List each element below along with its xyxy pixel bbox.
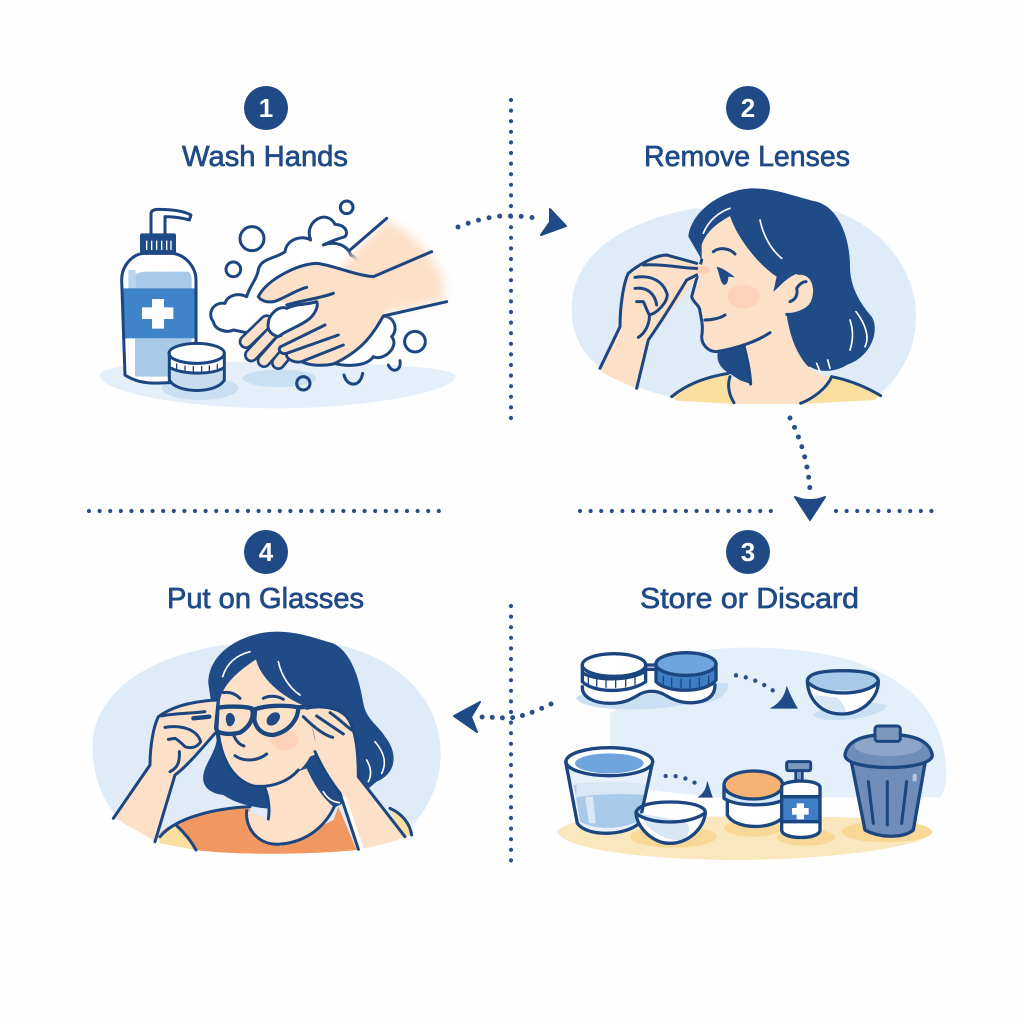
ground shadow xyxy=(100,362,456,408)
background blob xyxy=(93,645,441,852)
shirt sleeves xyxy=(158,808,412,850)
step 3 heading xyxy=(640,530,859,615)
cheek blush xyxy=(271,730,299,750)
arrow: step 3 to step 4 xyxy=(454,702,551,732)
step 2 heading: 2 xyxy=(741,93,755,123)
step 4 heading: 4 xyxy=(259,537,274,567)
soap bubbles xyxy=(226,201,425,390)
panel: store or discard illustration xyxy=(557,648,946,860)
step 4 heading xyxy=(167,530,364,615)
step 1 heading: Wash Hands xyxy=(182,141,348,173)
icon: right hand xyxy=(303,706,407,850)
soap foam xyxy=(211,217,395,365)
icon: soap pump bottle xyxy=(122,209,196,383)
icon: left hand xyxy=(113,700,217,842)
step 3 heading: Store or Discard xyxy=(640,583,859,615)
icon: jar xyxy=(169,343,224,391)
shirt xyxy=(672,375,880,404)
step 2 heading xyxy=(644,86,850,173)
panel: put on glasses illustration xyxy=(93,632,441,854)
icon: open jar xyxy=(724,771,783,826)
face details xyxy=(160,652,412,850)
icon: lens bowl xyxy=(807,671,878,714)
icon: hands xyxy=(246,218,447,365)
dotted dividers xyxy=(89,100,940,866)
step 1 heading: 1 xyxy=(259,93,273,123)
shadow spots xyxy=(162,370,316,400)
arrow: step 2 to step 3 xyxy=(790,418,825,520)
panel: wash hands illustration xyxy=(100,201,456,408)
step 4 heading: Put on Glasses xyxy=(167,583,364,615)
step 3 heading: 3 xyxy=(741,537,755,567)
icon: small bowl xyxy=(636,802,705,843)
cheek blush xyxy=(727,285,759,309)
icon: glass of water xyxy=(566,748,653,833)
shirt xyxy=(160,807,357,854)
hair xyxy=(688,188,875,387)
face xyxy=(218,659,318,787)
icon: trash can xyxy=(845,726,932,836)
arrow: to lens bowl xyxy=(736,675,797,708)
arrow: to jar xyxy=(666,776,712,797)
icon: glasses xyxy=(193,706,310,735)
shadow under bowl xyxy=(813,702,887,720)
face details xyxy=(672,208,881,403)
background blob xyxy=(610,648,946,797)
icon: solution bottle xyxy=(782,762,820,837)
shadow under case xyxy=(576,683,728,709)
face and neck xyxy=(692,216,832,404)
icon: lens case xyxy=(582,653,716,704)
step 1 heading xyxy=(182,86,348,173)
step 2 heading: Remove Lenses xyxy=(644,141,850,173)
shelf xyxy=(557,816,933,860)
panel: remove lenses illustration xyxy=(572,188,916,404)
shelf shadows xyxy=(630,820,932,848)
arrow: step 1 to step 2 xyxy=(458,209,566,235)
icon: hand holding lens xyxy=(600,255,710,388)
hair xyxy=(203,632,394,808)
neck xyxy=(247,768,333,844)
background blob xyxy=(572,208,916,402)
